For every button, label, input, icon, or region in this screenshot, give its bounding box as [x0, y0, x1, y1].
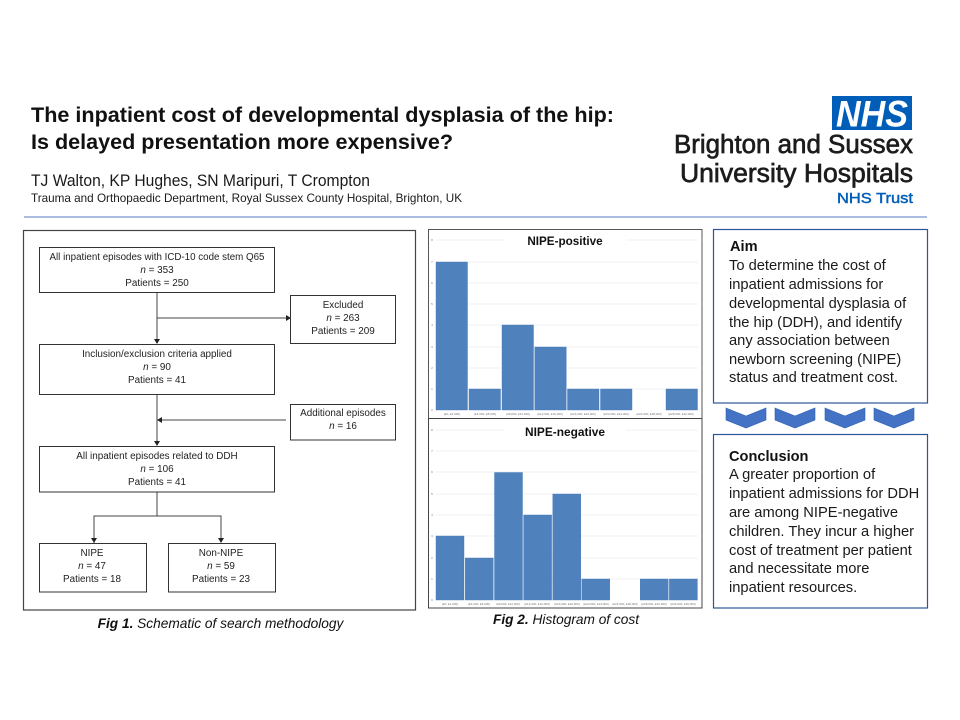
panel: aim: any association between [729, 333, 890, 349]
axis labels [431, 238, 694, 416]
panel: aim: Aim [730, 239, 758, 255]
axis labels: 4 [431, 513, 433, 517]
bars [436, 262, 698, 410]
axis labels: (£16,000, £20,000] [554, 602, 580, 606]
axis labels: 0 [431, 598, 433, 602]
axis labels: (£28,000, £32,000] [641, 602, 667, 606]
axis labels: [£0, £4,000] [442, 602, 458, 606]
panel: conclusion: are among NIPE-negative [729, 505, 898, 521]
box: all inpatient episodes: Patients = 250 [125, 278, 189, 289]
box: NIPE: NIPE [80, 548, 104, 559]
axis labels: (£4,000, £8,000] [468, 602, 490, 606]
box: Non-NIPE: n = 59 [207, 561, 235, 572]
axis labels: (£20,000, £24,000] [583, 602, 609, 606]
axis labels: 5 [431, 492, 433, 496]
box: excluded: n = 263 [326, 313, 360, 324]
axis labels: 7 [431, 449, 433, 453]
axis labels: (£32,000, £36,000] [670, 602, 696, 606]
axis labels: 7 [431, 260, 433, 264]
axis labels: 3 [431, 345, 433, 349]
panel: aim: To determine the cost of [729, 258, 887, 274]
panel: aim [714, 230, 928, 403]
box: Non-NIPE [168, 544, 276, 592]
chart title: NIPE-positive [527, 235, 603, 248]
box: excluded [290, 296, 396, 344]
axis labels: 8 [431, 238, 433, 242]
axis labels: (£12,000, £16,000] [537, 412, 563, 416]
axis labels: (£16,000, £20,000] [570, 412, 596, 416]
axis labels: 6 [431, 281, 433, 285]
box: Non-NIPE: Patients = 23 [192, 574, 250, 585]
box: inclusion/exclusion criteria: n = 90 [143, 362, 171, 373]
panel: conclusion: inpatient resources. [729, 580, 857, 596]
axis labels: (£4,000, £8,000] [474, 412, 496, 416]
authors: TJ Walton, KP Hughes, SN Maripuri, T Crompton [31, 171, 370, 190]
chart: NIPE-positive histogram [428, 230, 702, 418]
panel: conclusion: children. They incur a higher [729, 524, 914, 540]
box: all inpatient episodes: All inpatient episodes with ICD-10 code stem Q65 [50, 252, 265, 263]
axis labels: 8 [431, 428, 433, 432]
box: excluded: Excluded [323, 300, 363, 311]
chart title: NIPE-negative [525, 425, 605, 439]
trust name [674, 131, 914, 207]
title: The inpatient cost of developmental dysplasia of the hip: [31, 103, 614, 127]
axis labels: 3 [431, 534, 433, 538]
axis labels: (£8,000, £12,000] [506, 412, 530, 416]
connector arrows [91, 292, 291, 543]
trust name: NHS Trust [837, 190, 914, 207]
arrows: aim to conclusion chevrons [726, 408, 914, 428]
axis labels: (£8,000, £12,000] [496, 602, 520, 606]
panel: aim: the hip (DDH), and identify [729, 315, 903, 331]
axis labels: 2 [431, 556, 433, 560]
trust name: University Hospitals [680, 160, 913, 188]
NHS lozenge: NHS [836, 94, 908, 134]
axis labels: 4 [431, 323, 433, 327]
caption: figure 1: Fig 1. Schematic of search methodology [98, 616, 345, 631]
box: additional episodes: Additional episodes [300, 408, 386, 419]
panel: conclusion: inpatient admissions for DDH [729, 486, 919, 502]
chart: NIPE-negative histogram [428, 418, 702, 608]
panel: search methodology flowchart [24, 230, 416, 610]
box: all episodes related to DDH: Patients = 41 [128, 477, 186, 488]
box: all inpatient episodes: n = 353 [140, 265, 174, 276]
axis labels: 2 [431, 366, 433, 370]
axis labels: 0 [431, 408, 433, 412]
panel: conclusion: cost of treatment per patient [729, 543, 912, 559]
axis labels: 1 [431, 387, 433, 391]
axis labels [431, 428, 696, 606]
box: additional episodes: n = 16 [329, 421, 357, 432]
panel: conclusion: Conclusion [729, 449, 809, 465]
panel: aim: status and treatment cost. [729, 370, 898, 386]
panel: conclusion [714, 434, 928, 608]
box: NIPE: Patients = 18 [63, 574, 121, 585]
box: all episodes related to DDH [40, 446, 274, 492]
box: all episodes related to DDH: All inpatient episodes related to DDH [76, 451, 238, 462]
box: inclusion/exclusion criteria: Patients = 41 [128, 375, 186, 386]
panel: conclusion: A greater proportion of [729, 467, 876, 483]
panel: conclusion: and necessitate more [729, 561, 869, 577]
panel: aim: newborn screening (NIPE) [729, 352, 901, 368]
box: NIPE: n = 47 [78, 561, 106, 572]
affiliation: Trauma and Orthopaedic Department, Royal Sussex County Hospital, Brighton, UK [31, 192, 462, 205]
title: Is delayed presentation more expensive? [31, 130, 453, 154]
trust name: Brighton and Sussex [674, 131, 913, 159]
box: additional episodes [290, 404, 396, 440]
panel: aim: inpatient admissions for [729, 277, 883, 293]
axis labels: (£12,000, £16,000] [524, 602, 550, 606]
box: all inpatient episodes [40, 248, 274, 292]
axis labels: [£0, £4,000] [444, 412, 460, 416]
axis labels: (£24,000, £28,000] [636, 412, 662, 416]
axis labels: (£24,000, £28,000] [612, 602, 638, 606]
axis labels: (£20,000, £24,000] [603, 412, 629, 416]
axis labels: (£28,000, £32,000] [668, 412, 694, 416]
caption: figure 2: Fig 2. Histogram of cost [493, 612, 640, 627]
title [31, 103, 614, 154]
logo: NHS Trust [674, 94, 914, 207]
box: excluded: Patients = 209 [311, 326, 375, 337]
box: NIPE [40, 544, 146, 592]
axis labels: 6 [431, 470, 433, 474]
axis labels: 5 [431, 302, 433, 306]
axis labels: 1 [431, 577, 433, 581]
panel: aim: developmental dysplasia of [729, 296, 907, 312]
box: inclusion/exclusion criteria: Inclusion/exclusion criteria applied [82, 349, 232, 360]
bars [436, 472, 697, 600]
box: Non-NIPE: Non-NIPE [199, 548, 244, 559]
box: all episodes related to DDH: n = 106 [140, 464, 174, 475]
box: inclusion/exclusion criteria [40, 344, 274, 394]
